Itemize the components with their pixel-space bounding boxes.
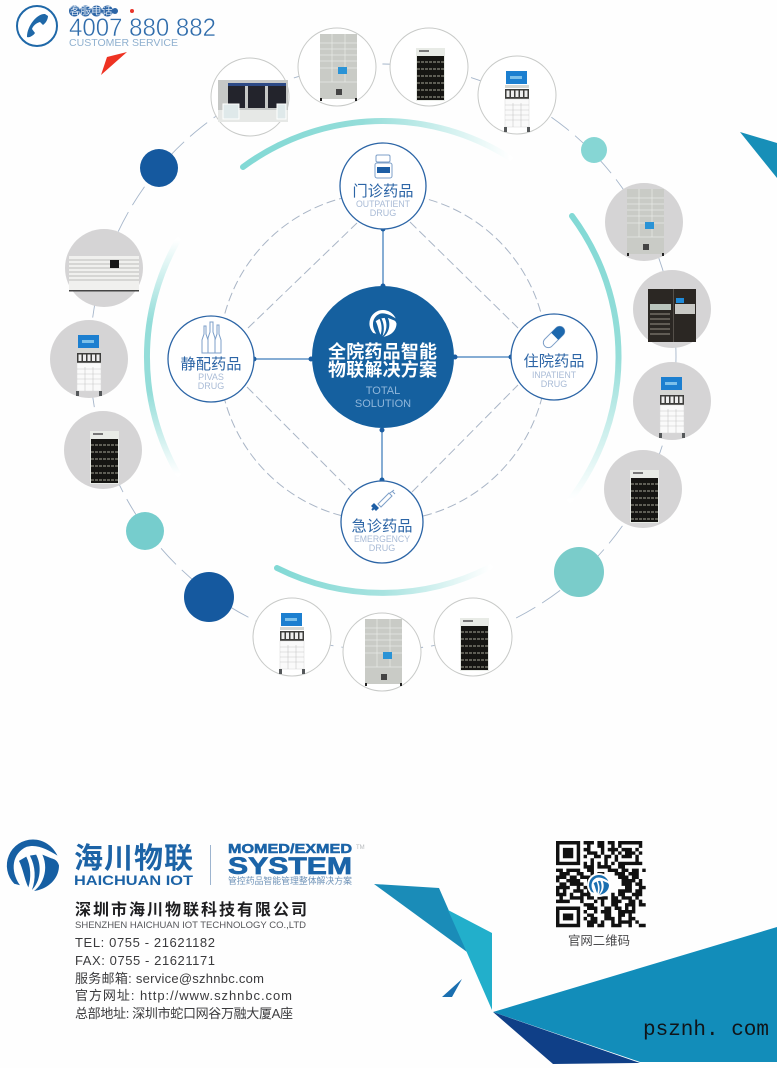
icon: medicine bottle xyxy=(375,155,392,178)
outer dashed ring xyxy=(90,64,676,650)
company contact block: 深圳市海川物联科技有限公司 xyxy=(75,900,307,919)
company contact block xyxy=(75,900,307,1021)
badge: hotline label xyxy=(69,4,118,18)
divider xyxy=(210,845,211,885)
product: automated pharmacy room xyxy=(211,58,289,136)
center: total solution xyxy=(312,286,454,428)
company contact block: 服务邮箱: service@szhnbc.com xyxy=(75,971,264,986)
connectors xyxy=(252,226,514,482)
product: trolley bottom xyxy=(253,598,331,676)
icon: ampoules xyxy=(202,322,221,353)
product: black shelf cabinet left xyxy=(64,411,142,489)
english label line 2: SOLUTION xyxy=(355,398,411,410)
badge: hotline label: 客服电话 xyxy=(70,4,112,18)
product: dark cabinet right xyxy=(633,270,711,348)
header: customer service phone xyxy=(17,4,216,75)
teal arcs xyxy=(147,121,619,593)
product: wide white cabinet left xyxy=(65,229,143,307)
company contact block: TEL: 0755 - 21621182 xyxy=(75,935,215,950)
company contact block: SHENZHEN HAICHUAN IOT TECHNOLOGY CO.,LTD xyxy=(75,920,306,931)
system brand xyxy=(228,842,365,886)
icon: brand mark xyxy=(369,310,396,337)
icon: syringe xyxy=(371,490,395,511)
product: trolley top xyxy=(478,56,556,134)
product: grey cabinet bottom xyxy=(343,613,421,691)
english label: TOTAL xyxy=(366,385,400,397)
heading: 全院药品智能 xyxy=(328,341,437,362)
red dot xyxy=(130,9,134,13)
english label line 2: DRUG xyxy=(370,208,396,218)
phone number: 4007 880 882 xyxy=(69,14,216,42)
product: grey cabinet right xyxy=(605,183,683,261)
origami bird shapes xyxy=(374,884,777,1064)
brand name: 海川物联 xyxy=(74,842,193,875)
product: trolley right xyxy=(633,362,711,440)
red paper shard xyxy=(101,52,127,75)
english label: OUTPATIENT xyxy=(356,199,410,209)
brand name xyxy=(74,842,194,888)
label: 静配药品 xyxy=(180,356,242,373)
node: outpatient drug xyxy=(340,143,426,229)
inner dashed network xyxy=(219,193,547,521)
system brand: 管控药品智能管理整体解决方案 xyxy=(228,875,352,886)
label: 门诊药品 xyxy=(352,183,414,200)
watermark: psznh. com xyxy=(643,1019,769,1042)
product: black shelf cabinet top xyxy=(390,28,468,106)
brand logo xyxy=(7,839,59,891)
product: black shelf cabinet bottom xyxy=(434,598,512,676)
company contact block: 总部地址: 深圳市蛇口网谷万融大厦A座 xyxy=(75,1006,293,1021)
label: 住院药品 xyxy=(524,352,584,370)
label: 急诊药品 xyxy=(352,518,412,535)
english label: EMERGENCY xyxy=(354,534,410,544)
ring accent dots xyxy=(126,137,607,622)
qr caption: 官网二维码 xyxy=(568,933,630,948)
english label: PIVAS xyxy=(198,372,224,382)
product: trolley left xyxy=(50,320,128,398)
company contact block: FAX: 0755 - 21621171 xyxy=(75,953,215,968)
customer service label: CUSTOMER SERVICE xyxy=(69,37,178,49)
heading line 2: 物联解决方案 xyxy=(328,359,437,380)
system brand: TM xyxy=(356,845,365,851)
node: emergency drug xyxy=(341,481,423,563)
company contact block: 官方网址: http://www.szhnbc.com xyxy=(75,988,292,1003)
english label: INPATIENT xyxy=(532,370,576,380)
qr code xyxy=(556,843,646,926)
brand name: HAICHUAN IOT xyxy=(74,872,194,888)
english label line 2: DRUG xyxy=(198,381,224,391)
icon: capsule xyxy=(541,324,567,350)
english label line 2: DRUG xyxy=(369,543,395,553)
product: black shelf cabinet right xyxy=(604,450,682,528)
node: pivas drug xyxy=(168,316,254,402)
english label line 2: DRUG xyxy=(541,379,567,389)
icon: telephone xyxy=(17,6,57,46)
system brand: MOMED/EXMED xyxy=(228,842,352,856)
system brand: SYSTEM xyxy=(228,853,352,880)
product: grey cabinet top xyxy=(298,28,376,106)
node: inpatient drug xyxy=(511,314,597,400)
top right corner triangle xyxy=(740,132,777,178)
